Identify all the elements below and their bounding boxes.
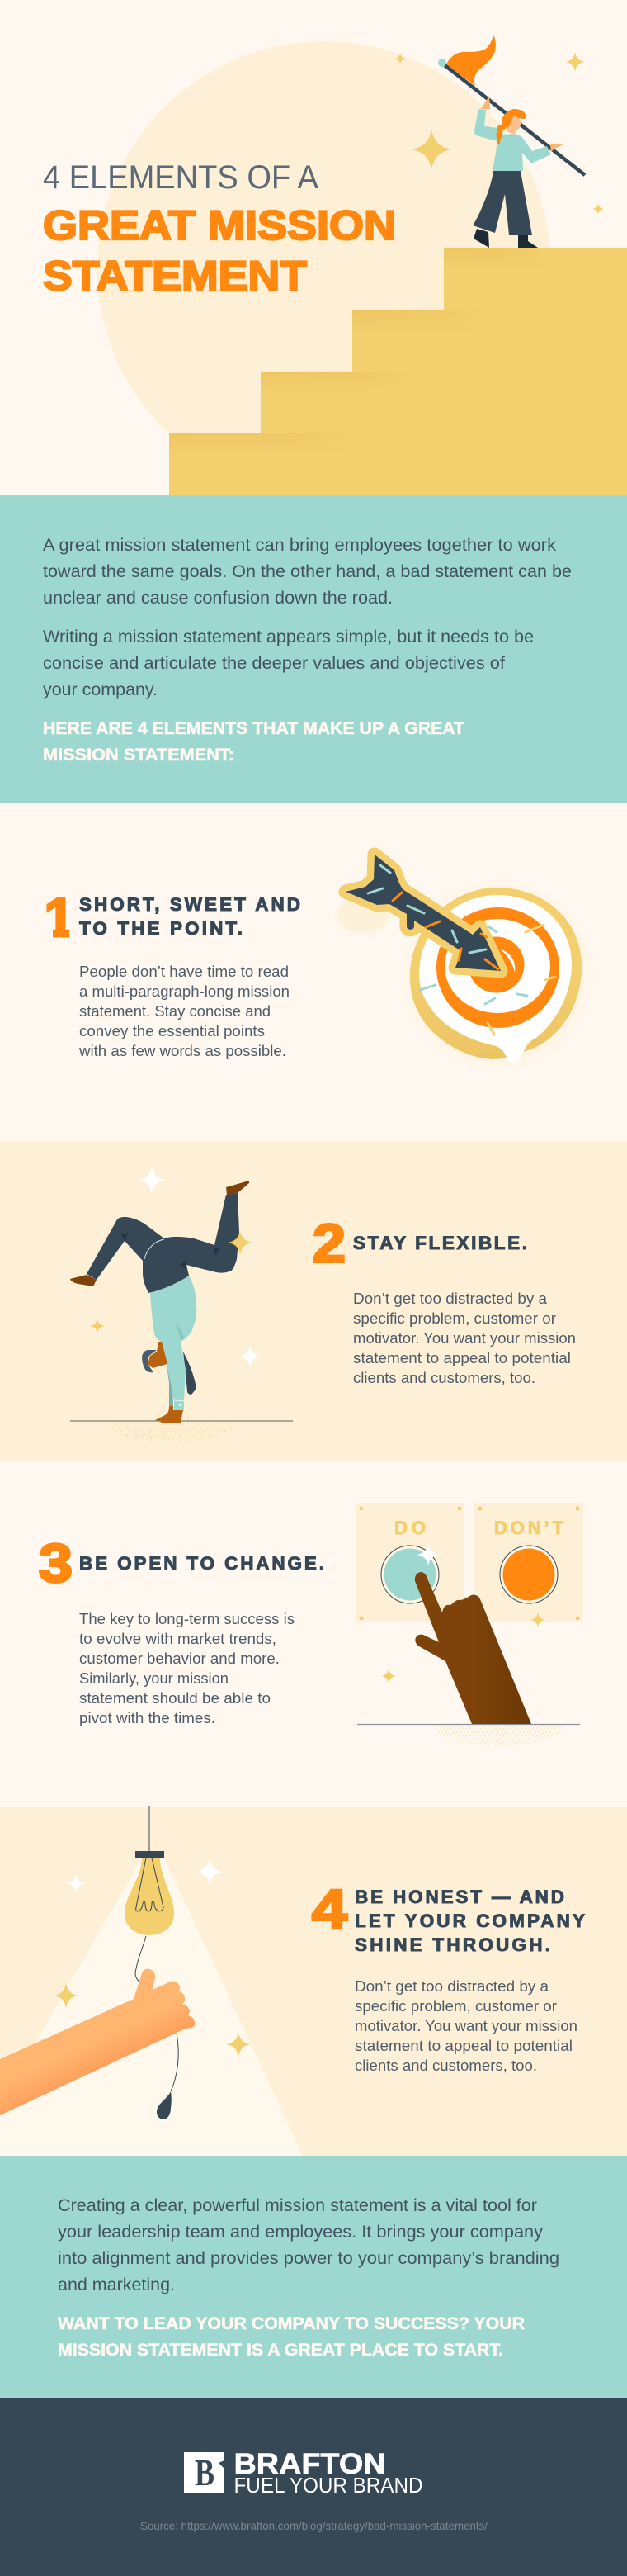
intro call to action bbox=[43, 719, 464, 765]
body 1: statement. Stay concise and bbox=[79, 1003, 271, 1020]
title bbox=[43, 159, 396, 299]
conclusion paragraph: Creating a clear, powerful mission statement is a vital tool for bbox=[58, 2196, 537, 2215]
body 2: clients and customers, too. bbox=[353, 1370, 535, 1386]
heading 4: BE HONEST — AND bbox=[355, 1887, 564, 1907]
intro paragraph 2: concise and articulate the deeper values and objectives of bbox=[43, 654, 505, 673]
body 2: specific problem, customer or bbox=[353, 1310, 556, 1327]
stipple halo bbox=[333, 877, 596, 1075]
intro paragraph 1: unclear and cause confusion down the road. bbox=[43, 589, 393, 608]
body 2 bbox=[353, 1290, 576, 1386]
title: GREAT MISSION bbox=[43, 202, 396, 249]
pointing hand bbox=[550, 144, 563, 152]
heading 1: TO THE POINT. bbox=[79, 918, 243, 939]
icon: person doing handstand bbox=[70, 1166, 293, 1442]
number 2: 2 bbox=[313, 1212, 346, 1273]
body 1: a multi-paragraph-long mission bbox=[79, 983, 290, 1000]
do card: DO bbox=[394, 1518, 426, 1538]
ground shadow bbox=[108, 1422, 236, 1442]
body 2: Don’t get too distracted by a bbox=[353, 1290, 548, 1307]
icon: light bulb and hand bbox=[0, 1806, 303, 2156]
title: 4 ELEMENTS OF A bbox=[43, 159, 318, 196]
body 4 bbox=[355, 1978, 578, 2074]
number 4: 4 bbox=[312, 1878, 347, 1939]
flag pole bbox=[438, 59, 585, 175]
filament bbox=[136, 1858, 163, 1911]
logo tagline: FUEL YOUR BRAND bbox=[234, 2473, 422, 2498]
sparkles bbox=[394, 52, 604, 215]
don't card: DON’T bbox=[494, 1518, 564, 1538]
icon: arrow hitting target bbox=[333, 855, 596, 1075]
target dashes bbox=[420, 925, 555, 1035]
source: Source: https://www.brafton.com/blog/strategy/bad-mission-statements/ bbox=[140, 2519, 488, 2532]
target outer ring bbox=[410, 888, 582, 1059]
sparkles bbox=[381, 1543, 545, 1683]
intro paragraph 2 bbox=[43, 627, 534, 699]
heading 1 bbox=[79, 894, 300, 939]
cable bbox=[148, 1806, 150, 1852]
ground line bbox=[357, 1724, 580, 1726]
body 3: statement should be able to bbox=[79, 1690, 271, 1707]
body 3: customer behavior and more. bbox=[79, 1650, 280, 1667]
shoes bbox=[474, 229, 538, 248]
target white ring bbox=[419, 895, 572, 1063]
heading 3: BE OPEN TO CHANGE. bbox=[79, 1553, 324, 1574]
pull cord bbox=[135, 1936, 178, 2091]
icon: woman holding flag bbox=[438, 35, 585, 248]
body 2: statement to appeal to potential bbox=[353, 1350, 571, 1366]
flag bbox=[446, 35, 496, 86]
body 4: Don’t get too distracted by a bbox=[355, 1978, 549, 1995]
lamp cap bbox=[135, 1851, 164, 1858]
panel: element 1 bbox=[46, 847, 586, 1065]
near hand bbox=[160, 1410, 183, 1423]
panel: element 2 bbox=[0, 1141, 627, 1461]
arrow bbox=[346, 855, 501, 971]
hair bbox=[142, 1350, 157, 1372]
hair and braid bbox=[497, 109, 526, 144]
conclusion paragraph: into alignment and provides power to your company’s branding bbox=[58, 2249, 559, 2268]
target orange ring bbox=[436, 907, 559, 1028]
pointing hand bbox=[415, 1572, 531, 1724]
right shoe bbox=[226, 1181, 249, 1195]
raised hand bbox=[481, 96, 490, 109]
trouser creases bbox=[121, 1233, 220, 1269]
body 2: motivator. You want your mission bbox=[353, 1330, 576, 1347]
body 1: People don’t have time to read bbox=[79, 964, 289, 980]
jacket tail bbox=[183, 1352, 196, 1395]
shirt bbox=[150, 1276, 196, 1401]
logo mark bbox=[184, 2451, 224, 2493]
logo mark: B bbox=[195, 2451, 214, 2493]
face bbox=[507, 116, 521, 135]
panel: introduction bbox=[0, 495, 627, 803]
target inner white bbox=[445, 919, 550, 1013]
logo bbox=[184, 2448, 422, 2498]
panel: footer bbox=[0, 2398, 627, 2576]
background circle bbox=[97, 41, 551, 495]
icon: do and don't buttons bbox=[356, 1503, 583, 1745]
body 3: Similarly, your mission bbox=[79, 1670, 229, 1687]
light beam bbox=[0, 1858, 303, 2156]
body 3: pivot with the times. bbox=[79, 1710, 215, 1726]
intro paragraph 2: your company. bbox=[43, 680, 158, 699]
stipple shadow bbox=[433, 1725, 564, 1745]
body 1: with as few words as possible. bbox=[78, 1043, 286, 1059]
intro paragraph 1 bbox=[43, 536, 572, 608]
don't card bbox=[474, 1503, 583, 1622]
sparkles bbox=[90, 1166, 262, 1368]
cuff bbox=[174, 1400, 184, 1410]
conclusion paragraph: your leadership team and employees. It brings your company bbox=[58, 2223, 544, 2242]
body 4: clients and customers, too. bbox=[355, 2057, 537, 2074]
body 4: specific problem, customer or bbox=[355, 1998, 557, 2015]
far arm bbox=[167, 1364, 173, 1406]
intro paragraph 1: toward the same goals. On the other hand, a bad statement can be bbox=[43, 562, 572, 581]
heading 4: SHINE THROUGH. bbox=[355, 1934, 550, 1955]
intro call to action: MISSION STATEMENT: bbox=[43, 746, 234, 765]
heading 1: SHORT, SWEET AND bbox=[79, 894, 300, 915]
bulb bbox=[125, 1858, 174, 1935]
heading 2: STAY FLEXIBLE. bbox=[353, 1233, 527, 1253]
panel: conclusion bbox=[0, 2156, 627, 2398]
body 3: The key to long-term success is bbox=[79, 1611, 295, 1627]
number 1: 1 bbox=[45, 887, 74, 948]
intro call to action: HERE ARE 4 ELEMENTS THAT MAKE UP A GREAT bbox=[43, 719, 464, 738]
body 1: convey the essential points bbox=[79, 1023, 265, 1039]
bullseye bbox=[469, 936, 525, 992]
ground line bbox=[70, 1420, 293, 1422]
trousers bbox=[87, 1193, 239, 1293]
number 3: 3 bbox=[39, 1532, 73, 1593]
head bbox=[148, 1342, 167, 1368]
far hand bbox=[155, 1406, 173, 1422]
conclusion call to action: WANT TO LEAD YOUR COMPANY TO SUCCESS? YOUR bbox=[58, 2314, 525, 2333]
heading 4 bbox=[355, 1887, 585, 1955]
conclusion paragraph: and marketing. bbox=[58, 2275, 175, 2294]
arm and hand bbox=[0, 1969, 195, 2115]
conclusion paragraph bbox=[58, 2196, 559, 2294]
staircase bbox=[169, 248, 627, 495]
panel: element 3 bbox=[0, 1461, 627, 1807]
panel: element 4 bbox=[0, 1806, 627, 2156]
logo wordmark: BRAFTON bbox=[234, 2448, 386, 2480]
intro paragraph 1: A great mission statement can bring employees together to work bbox=[43, 536, 557, 555]
left shoe bbox=[70, 1275, 97, 1286]
shirt fold bbox=[176, 1321, 185, 1341]
body 4: motivator. You want your mission bbox=[355, 2018, 578, 2034]
body 1 bbox=[78, 964, 290, 1059]
panel: hero bbox=[43, 35, 627, 495]
sparkles bbox=[54, 1858, 251, 2057]
heading 4: LET YOUR COMPANY bbox=[355, 1911, 585, 1931]
intro paragraph 2: Writing a mission statement appears simple, but it needs to be bbox=[43, 627, 534, 646]
arrow dashes bbox=[368, 865, 498, 969]
conclusion call to action: MISSION STATEMENT IS A GREAT PLACE TO START. bbox=[58, 2341, 503, 2360]
waist line bbox=[144, 1239, 164, 1259]
title: STATEMENT bbox=[43, 253, 307, 299]
conclusion call to action bbox=[58, 2314, 525, 2360]
raised arm bbox=[474, 109, 497, 141]
body 4: statement to appeal to potential bbox=[355, 2038, 573, 2054]
torso and arm bbox=[493, 134, 551, 171]
cord weight bbox=[157, 2091, 172, 2119]
trousers bbox=[473, 171, 532, 235]
body 3: to evolve with market trends, bbox=[79, 1631, 276, 1647]
do card bbox=[356, 1503, 464, 1622]
body 3 bbox=[79, 1611, 295, 1726]
